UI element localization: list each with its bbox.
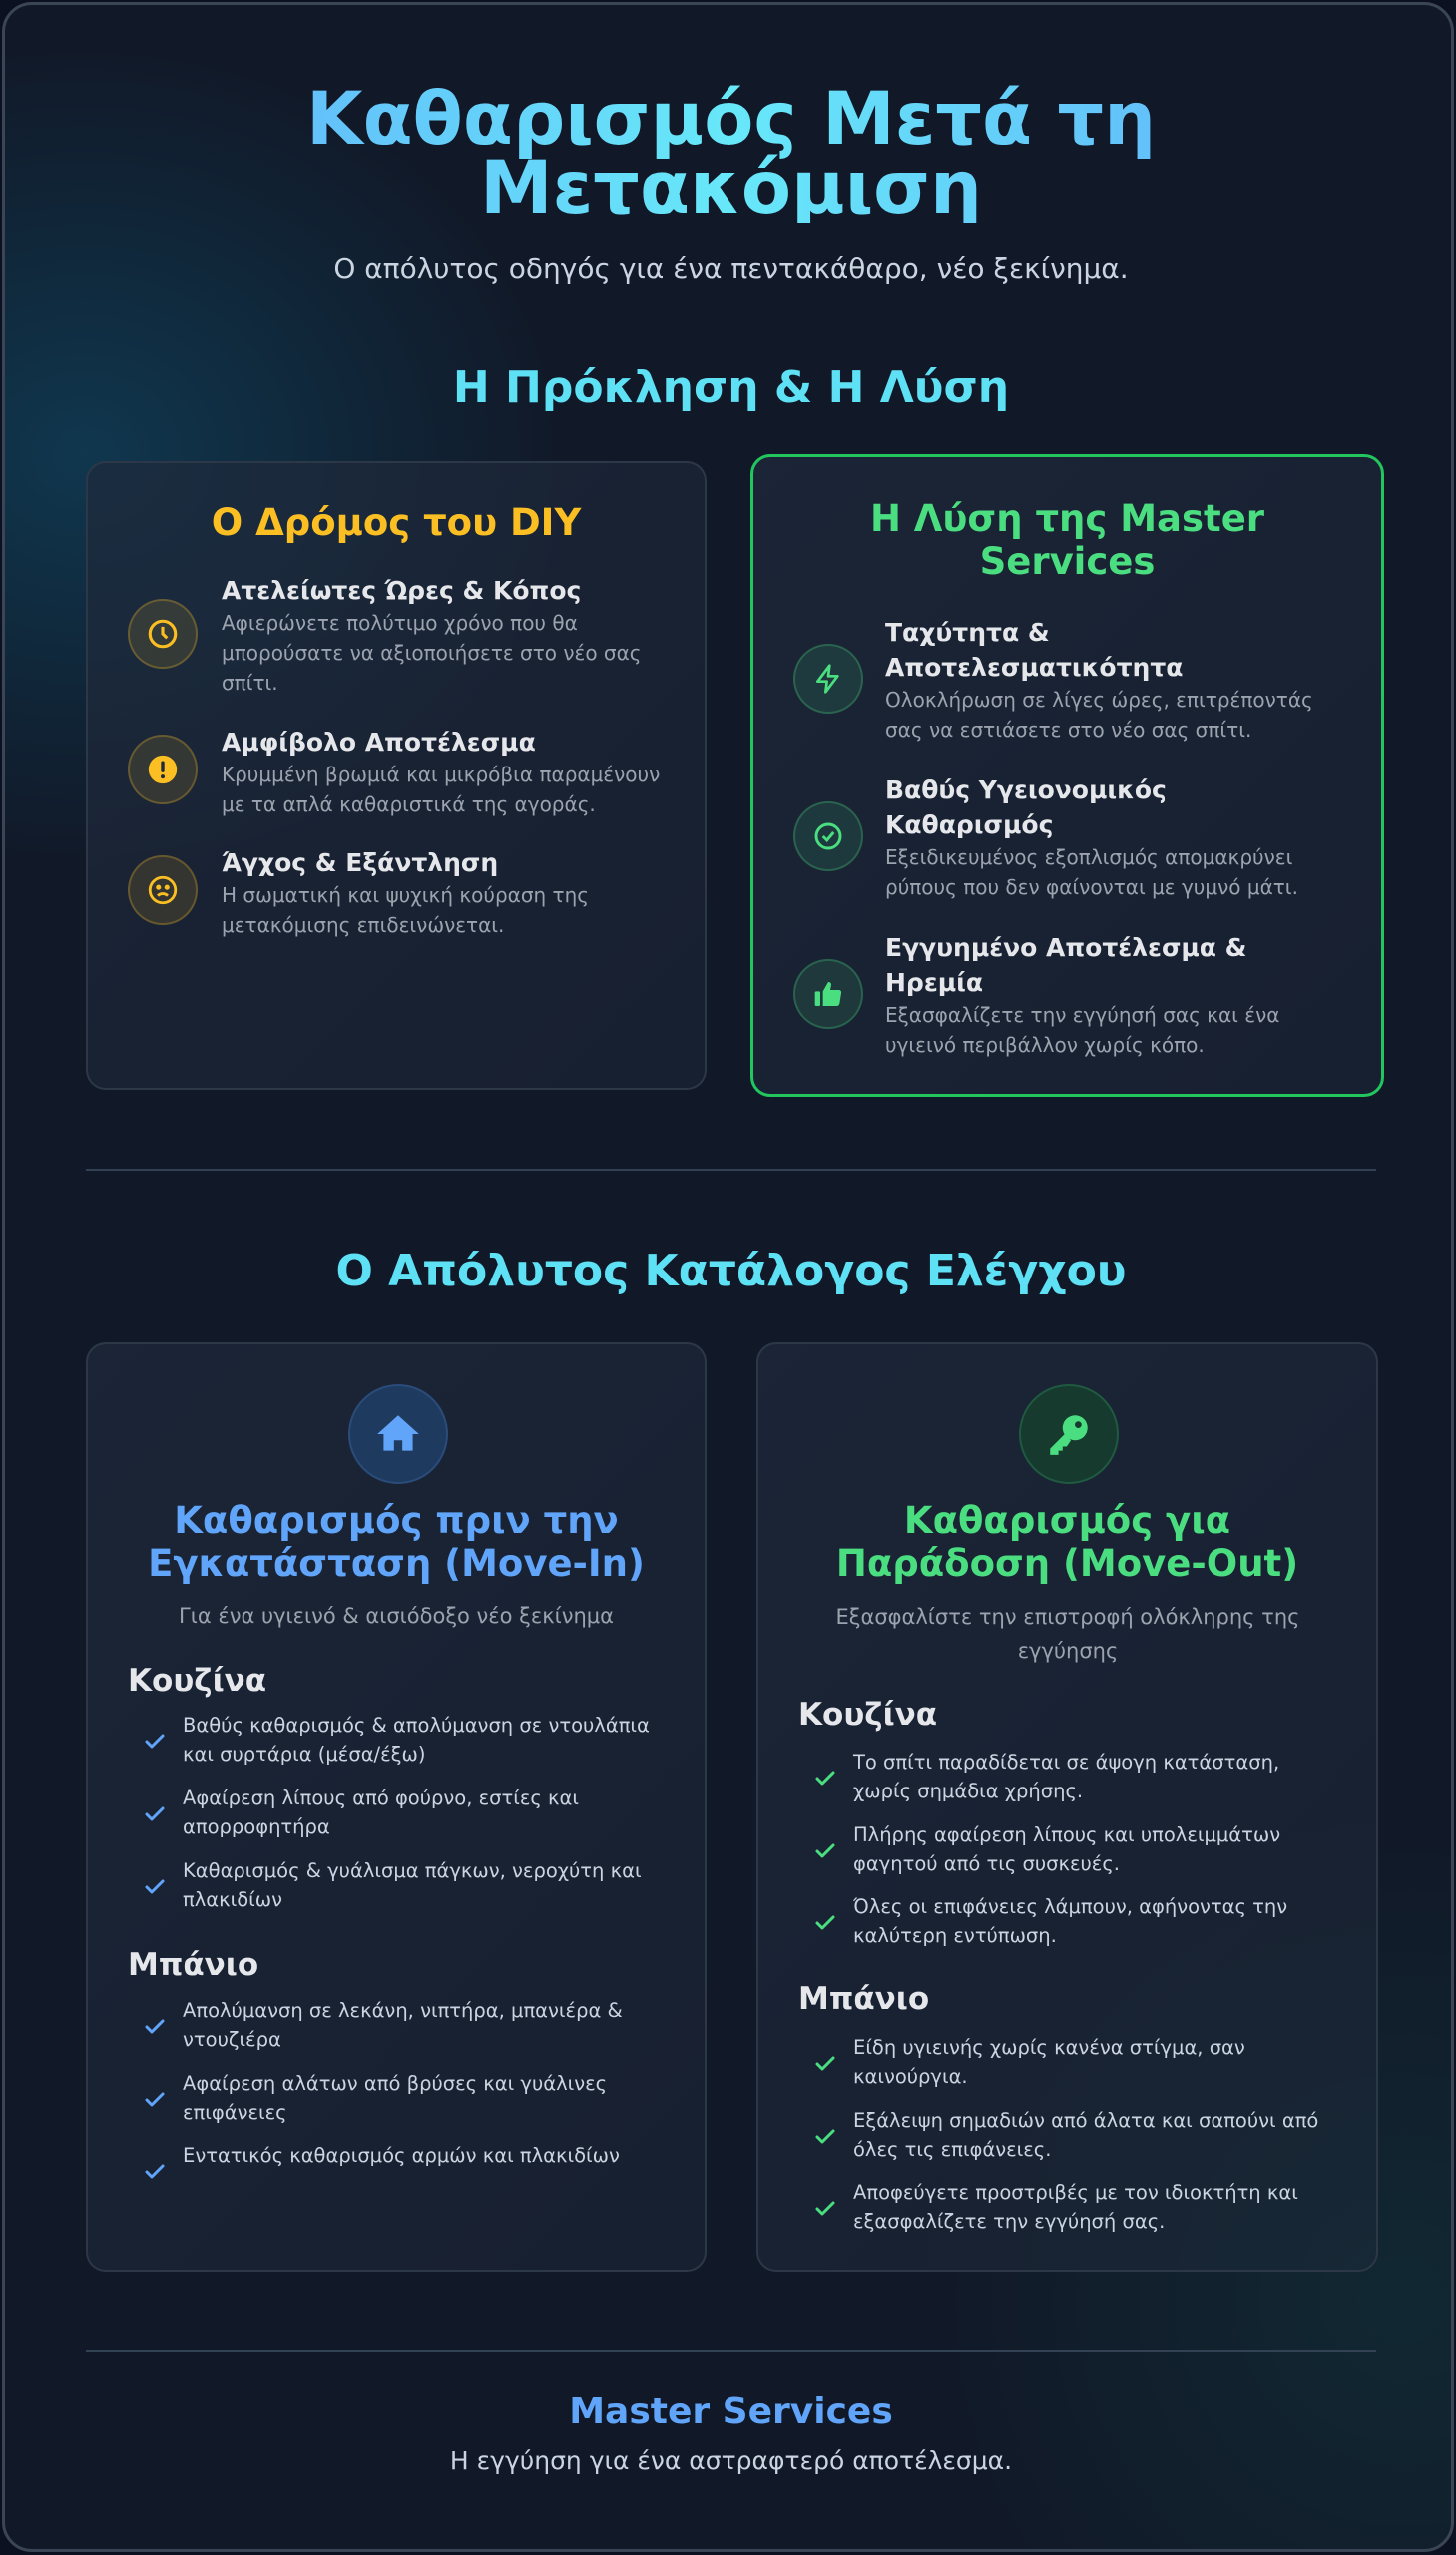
subtitle: Ο απόλυτος οδηγός για ένα πεντακάθαρο, νέο ξεκίνημα. [333, 253, 1129, 285]
item: hygiene: Βαθύς Υγειονομικός Καθαρισμός [885, 775, 1167, 839]
icon: lightning [793, 644, 863, 714]
item: guaranteed: Εγγυημένο Αποτέλεσμα & Ηρεμία [885, 933, 1247, 997]
panel title: move-in [148, 1499, 645, 1585]
item: endless hours [128, 576, 642, 695]
title: Μετακόμιση [480, 146, 982, 231]
icon: sad face [128, 855, 198, 925]
title: Καθαρισμός Μετά τη [306, 77, 1156, 162]
section heading: checklist: Ο Απόλυτος Κατάλογος Ελέγχου [335, 1246, 1127, 1296]
bathroom list [815, 2036, 1318, 2233]
kitchen list: Πλήρης αφαίρεση λίπους και υπολειμμάτων φαγητού από τις συσκευές. [853, 1823, 1280, 1875]
subtitle: move-in: Για ένα υγιεινό & αισιόδοξο νέο ξεκίνημα [179, 1604, 614, 1628]
kitchen list [145, 1714, 650, 1911]
bathroom list: Εξάλειψη σημαδιών από άλατα και σαπούνι από όλες τις επιφάνειες. [853, 2109, 1318, 2161]
item: hygiene: Εξειδικευμένος εξοπλισμός απομακρύνει ρύπους που δεν φαίνονται με γυμνό μάτι. [885, 845, 1298, 899]
kitchen list: Αφαίρεση λίπους από φούρνο, εστίες και απορροφητήρα [183, 1787, 579, 1838]
panel: DIY [86, 461, 707, 1090]
heading: kitchen: Κουζίνα [128, 1663, 266, 1699]
item: speed: Ταχύτητα & Αποτελεσματικότητα [885, 618, 1183, 682]
kitchen list: Το σπίτι παραδίδεται σε άψογη κατάσταση, χωρίς σημάδια χρήσης. [853, 1751, 1279, 1802]
item: stress: Η σωματική και ψυχική κούραση της μετακόμισης επιδεινώνεται. [222, 883, 589, 937]
item: hygiene [793, 775, 1298, 899]
kitchen list: Καθαρισμός & γυάλισμα πάγκων, νεροχύτη και πλακιδίων [183, 1859, 642, 1911]
item: speed: Ολοκλήρωση σε λίγες ώρες, επιτρέποντάς σας να εστιάσετε στο νέο σας σπίτι. [885, 688, 1313, 742]
bathroom list [145, 1999, 623, 2179]
item: doubtful result: Κρυμμένη βρωμιά και μικρόβια παραμένουν με τα απλά καθαριστικά της αγοράς. [222, 763, 660, 816]
kitchen list [815, 1751, 1287, 1947]
icon: thumbs up [793, 959, 863, 1029]
item: doubtful result: Αμφίβολο Αποτέλεσμα [222, 728, 536, 757]
heading: bathroom: Μπάνιο [798, 1981, 929, 2017]
icon: check circle [793, 801, 863, 871]
bathroom list: Αποφεύγετε προστριβές με τον ιδιοκτήτη και εξασφαλίζετε την εγγύησή σας. [853, 2181, 1298, 2233]
title [5, 85, 1456, 223]
panel title: move-in: Εγκατάσταση (Move-In) [148, 1542, 645, 1585]
panel: move-out [756, 1342, 1378, 2272]
icon: clock [128, 599, 198, 669]
panel title: move-out: Καθαρισμός για [904, 1499, 1230, 1542]
kitchen list: Βαθύς καθαρισμός & απολύμανση σε ντουλάπια και συρτάρια (μέσα/έξω) [183, 1714, 650, 1766]
panel title: move-out: Παράδοση (Move-Out) [836, 1542, 1298, 1585]
panel title: move-out [836, 1499, 1298, 1585]
icon: warning [128, 735, 198, 804]
icon: house [348, 1384, 448, 1484]
heading: kitchen: Κουζίνα [798, 1697, 937, 1733]
section heading: challenge & solution: Η Πρόκληση & Η Λύση [453, 362, 1009, 413]
item: endless hours: Αφιερώνετε πολύτιμο χρόνο που θα μπορούσατε να αξιοποιήσετε στο νέο σας σπίτι. [222, 611, 642, 695]
panel title: solution [870, 497, 1264, 583]
panel title: solution: Η Λύση της Master [870, 497, 1264, 540]
bathroom list: Είδη υγιεινής χωρίς κανένα στίγμα, σαν καινούργια. [853, 2036, 1245, 2088]
icon: key [1019, 1384, 1119, 1484]
panel: move-in [86, 1342, 707, 2272]
footer tagline: Η εγγύηση για ένα αστραφτερό αποτέλεσμα. [450, 2446, 1012, 2475]
item: doubtful result [128, 728, 660, 816]
item: speed [793, 618, 1313, 742]
bathroom list: Αφαίρεση αλάτων από βρύσες και γυάλινες επιφάνειες [183, 2072, 607, 2124]
panel title: DIY: Ο Δρόμος του DIY [212, 501, 581, 544]
item: endless hours: Ατελείωτες Ώρες & Κόπος [222, 576, 581, 605]
subtitle: move-out: Εξασφαλίστε την επιστροφή ολόκληρης της εγγύησης [836, 1605, 1299, 1663]
panel title: move-in: Καθαρισμός πριν την [174, 1499, 619, 1542]
footer brand: Master Services [569, 2391, 893, 2432]
item: stress [128, 848, 589, 937]
panel: Master Services solution [750, 454, 1384, 1097]
heading: bathroom: Μπάνιο [128, 1947, 258, 1983]
item: guaranteed: Εξασφαλίζετε την εγγύησή σας και ένα υγιεινό περιβάλλον χωρίς κόπο. [885, 1003, 1279, 1057]
kitchen list: Όλες οι επιφάνειες λάμπουν, αφήνοντας την καλύτερη εντύπωση. [853, 1895, 1287, 1947]
item: stress: Άγχος & Εξάντληση [222, 848, 498, 877]
item: guaranteed [793, 933, 1279, 1057]
panel title: solution: Services [980, 540, 1155, 583]
bathroom list: Εντατικός καθαρισμός αρμών και πλακιδίων [183, 2144, 620, 2167]
bathroom list: Απολύμανση σε λεκάνη, νιπτήρα, μπανιέρα & ντουζιέρα [183, 1999, 623, 2051]
